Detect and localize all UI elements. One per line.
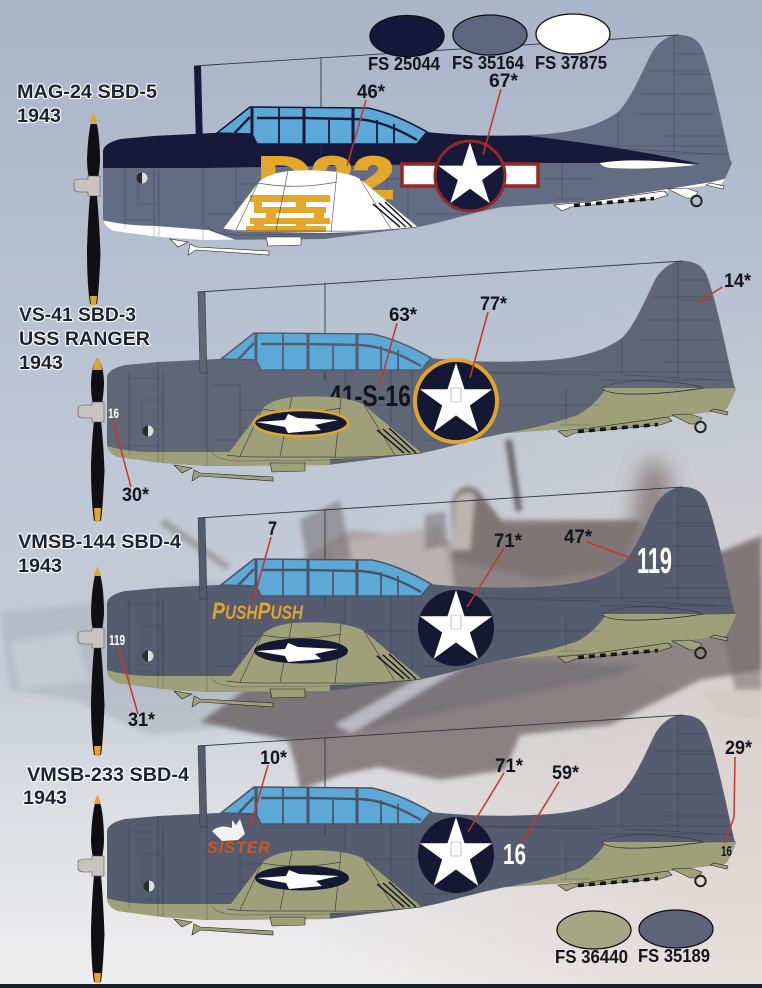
callout numbers: 46* [357,81,385,103]
callout leader lines [113,89,735,843]
wing [227,396,422,459]
label: VMSB-144 SBD-4: VMSB-144 SBD-4 [18,531,181,553]
callout numbers: 29* [725,737,752,759]
antenna mast and wires [198,715,683,835]
swatch labels top: FS 35164 [452,53,524,73]
label: VMSB-233 SBD-4: VMSB-233 SBD-4 [27,764,189,786]
tail number: 119 [637,540,672,581]
propeller [78,795,104,983]
callout numbers: 67* [489,70,518,92]
fuselage number: 16 [503,839,526,871]
callout numbers: 30* [122,484,149,506]
colour swatches top [370,14,610,56]
swatch labels bottom [555,946,710,967]
tail number: 16 [721,843,732,860]
background photo of aircraft [0,440,762,790]
exhaust [136,172,148,184]
swatch labels top: FS 37875 [535,53,607,73]
exhaust [142,650,154,662]
label: VMSB-144 SBD-4: 1943 [18,555,62,577]
fuselage base [107,261,736,466]
landing gear and details [174,409,728,481]
nose number: 16 [108,405,119,421]
label: VMSB-233 SBD-4: 1943 [23,787,67,809]
propeller [78,358,104,522]
callout numbers: 14* [724,270,751,292]
callout numbers: 47* [564,526,592,548]
exhaust [142,426,154,436]
plane 4: VMSB-233 SBD-4 [78,715,740,983]
propeller [78,567,104,756]
swatch labels top [368,53,607,74]
plane 3: VMSB-144 SBD-4 [78,487,740,756]
callout numbers: 10* [260,747,287,769]
camouflage layers [100,716,740,924]
wing [223,170,418,233]
wing [227,850,422,913]
landing gear and details [174,635,728,707]
camouflage layers [100,488,740,696]
plane 1: MAG-24 SBD-5 [74,35,736,305]
yellow wing code [246,195,330,232]
label: VMSB-233 SBD-4 [23,764,189,809]
yellow code D22: D22 [258,146,394,211]
canopy [221,333,431,370]
exhaust [144,880,154,892]
colour swatches bottom [557,910,713,949]
plane 2: VS-41 SBD-3 [78,261,740,522]
fuselage base [107,715,736,920]
wing roundel [254,410,348,436]
antenna mast and wires [198,261,683,381]
label: MAG-24 SBD-5 [17,81,157,127]
callout numbers: 77* [480,293,507,315]
canopy [217,107,427,144]
landing gear and details [170,183,724,255]
fuselage roundel [418,817,494,893]
wing roundel [255,866,349,890]
roundel with bars [402,141,538,211]
fuselage roundel [415,360,497,442]
name Push Push: PUSHPUSH [212,598,304,625]
label: VS-41 SBD-3: VS-41 SBD-3 [19,304,136,326]
canopy [221,559,431,596]
callout numbers: 31* [128,709,155,731]
label: MAG-24 SBD-5: 1943 [17,105,61,127]
nose art bird [212,819,245,841]
swatch labels bottom: FS 36440 [555,947,628,967]
callout numbers: 71* [494,530,522,552]
label: VS-41 SBD-3: 1943 [19,352,63,374]
callout numbers: 7 [268,518,277,540]
wing [227,622,422,685]
fuselage base [107,487,736,692]
landing gear and details [174,863,728,935]
callout numbers [122,70,752,784]
nose number: 119 [109,632,125,649]
antenna mast and wires [198,487,683,607]
camouflage layers [96,36,736,254]
callout numbers: 63* [389,304,417,326]
canopy [221,787,431,824]
label: MAG-24 SBD-5: MAG-24 SBD-5 [17,81,157,103]
fuselage base [103,35,732,240]
wing roundel [254,638,348,664]
callout numbers: 71* [495,755,523,777]
antenna mast and wires [194,35,679,155]
label: VMSB-144 SBD-4 [18,531,181,577]
swatch labels bottom: FS 35189 [638,946,710,966]
label: VS-41 SBD-3: USS RANGER [19,328,150,350]
code 41-S-16: 41-S-16 [329,380,411,413]
callout numbers: 59* [552,762,579,784]
camouflage layers [100,262,740,470]
label: VS-41 SBD-3 [19,304,150,374]
propeller [74,113,100,305]
swatch labels top: FS 25044 [368,54,440,74]
name Sister: SISTER [207,838,271,857]
fuselage roundel [418,590,494,666]
